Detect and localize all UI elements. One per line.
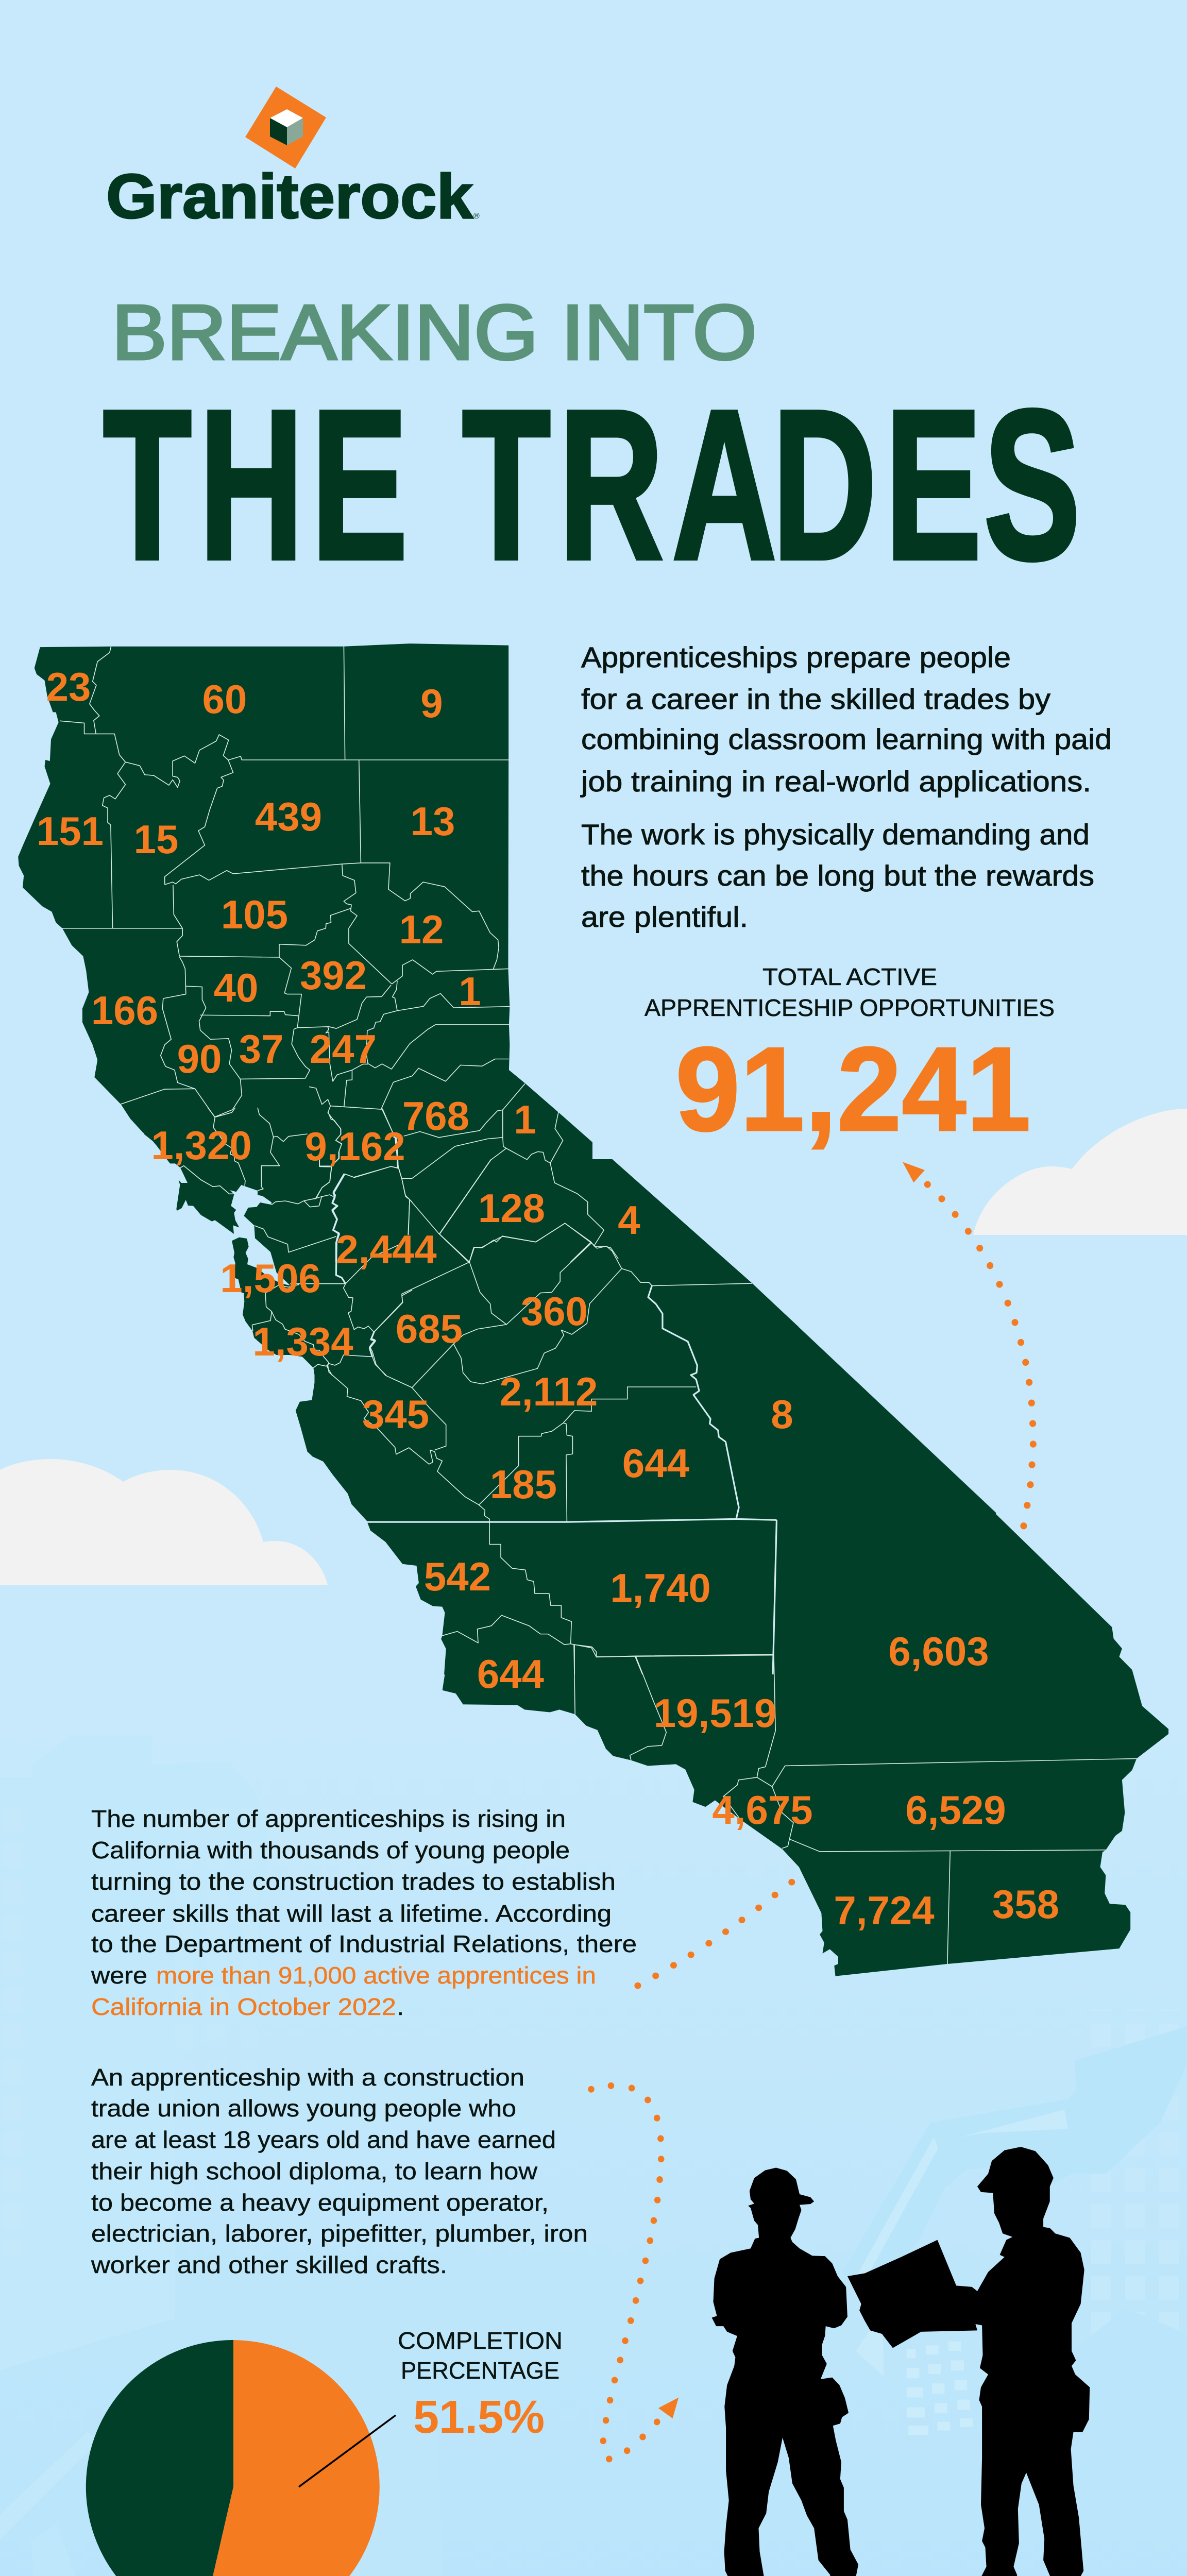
text block: apprenticeships rising: were <box>91 1962 147 1989</box>
completion label <box>398 2327 563 2443</box>
map of California counties <box>18 643 1168 1976</box>
intro text block: Apprenticeships prepare people <box>581 641 1011 673</box>
text block: apprenticeships rising: to the Department of Industrial Relations, there <box>91 1930 637 1957</box>
county apprenticeship counts: 439 <box>255 794 322 839</box>
silhouette: worker with crossed arms <box>712 2168 900 2576</box>
county apprenticeship counts: 60 <box>202 676 247 722</box>
text block: construction trade union: electrician, laborer, pipefitter, plumber, iron <box>91 2220 588 2247</box>
county apprenticeship counts: 185 <box>490 1462 557 1507</box>
county borders <box>60 647 1137 1964</box>
county apprenticeship counts <box>37 664 1059 1933</box>
county apprenticeship counts: 166 <box>91 988 158 1033</box>
total opportunities callout: APPRENTICESHIP OPPORTUNITIES <box>645 994 1055 1021</box>
county apprenticeship counts: 13 <box>411 799 455 844</box>
county apprenticeship counts: 644 <box>622 1440 689 1486</box>
total opportunities callout: 91,241 <box>675 1023 1031 1156</box>
county apprenticeship counts: 8 <box>771 1392 793 1437</box>
county apprenticeship counts: 358 <box>992 1882 1059 1927</box>
county apprenticeship counts: 4 <box>618 1197 640 1243</box>
text block: apprenticeships rising: California in October 2022 <box>91 1993 396 2020</box>
county apprenticeship counts: 105 <box>221 892 288 937</box>
intro text block: combining classroom learning with paid <box>581 723 1112 755</box>
county apprenticeship counts: 15 <box>134 817 178 862</box>
completion label: COMPLETION <box>398 2327 563 2354</box>
intro text block <box>580 641 1112 933</box>
arrow: dotted curve to workers <box>588 2082 679 2462</box>
county apprenticeship counts: 37 <box>239 1026 283 1072</box>
completion label: 51.5% <box>413 2392 545 2443</box>
faint construction backdrop <box>0 1736 1187 2576</box>
county apprenticeship counts: 19,519 <box>654 1690 776 1736</box>
intro text block: The work is physically demanding and <box>581 818 1090 851</box>
map land fill <box>18 643 1168 1976</box>
text block: construction trade union: worker and other skilled crafts. <box>91 2251 447 2278</box>
county apprenticeship counts: 2,112 <box>500 1369 598 1414</box>
county apprenticeship counts: 6,529 <box>905 1787 1006 1833</box>
county apprenticeship counts: 90 <box>177 1036 222 1081</box>
logo: Graniterock: ® <box>473 212 480 221</box>
county apprenticeship counts: 7,724 <box>834 1888 935 1933</box>
county apprenticeship counts: 40 <box>214 965 258 1010</box>
arrow: dotted from map to text <box>634 1879 795 1989</box>
county apprenticeship counts: 247 <box>310 1026 377 1072</box>
text block: construction trade union: to become a heavy equipment operator, <box>91 2189 549 2216</box>
text block: apprenticeships rising: The number of apprenticeships is rising in <box>91 1805 566 1832</box>
intro text block: job training in real-world applications. <box>580 765 1091 798</box>
county apprenticeship counts: 1 <box>459 969 481 1014</box>
intro text block: are plentiful. <box>581 901 748 933</box>
text block: apprenticeships rising <box>91 1805 637 2020</box>
text block: construction trade union: trade union allows young people who <box>91 2095 516 2122</box>
county apprenticeship counts: 542 <box>424 1554 491 1599</box>
county apprenticeship counts: 392 <box>300 953 367 998</box>
county apprenticeship counts: 6,603 <box>888 1629 989 1674</box>
pie chart: completion percentage <box>86 2340 396 2576</box>
text block: construction trade union <box>91 2064 588 2278</box>
county apprenticeship counts: 1,740 <box>610 1565 711 1611</box>
text block: apprenticeships rising: career skills that will last a lifetime. According <box>91 1900 612 1927</box>
intro text block: for a career in the skilled trades by <box>581 683 1050 715</box>
text block: apprenticeships rising: more than 91,000 active apprentices in <box>156 1962 596 1989</box>
cloud: left <box>0 1459 328 1585</box>
logo: Graniterock: Graniterock <box>106 161 473 231</box>
county apprenticeship counts: 9,162 <box>304 1124 405 1169</box>
county apprenticeship counts: 685 <box>396 1306 463 1351</box>
county apprenticeship counts: 1,320 <box>151 1123 252 1168</box>
county apprenticeship counts: 1,334 <box>252 1319 353 1364</box>
county apprenticeship counts: 360 <box>521 1289 588 1334</box>
county apprenticeship counts: 128 <box>478 1185 545 1231</box>
intro text block: the hours can be long but the rewards <box>581 859 1094 892</box>
text block: construction trade union: An apprenticeship with a construction <box>91 2064 524 2091</box>
county apprenticeship counts: 644 <box>477 1651 544 1697</box>
completion label: PERCENTAGE <box>401 2357 559 2384</box>
total opportunities callout: TOTAL ACTIVE <box>762 963 937 990</box>
logo: Graniterock <box>106 87 480 231</box>
cloud: right <box>973 1109 1187 1235</box>
county apprenticeship counts: 23 <box>46 664 91 709</box>
county apprenticeship counts: 151 <box>37 808 104 854</box>
county apprenticeship counts: 12 <box>399 907 444 952</box>
text block: apprenticeships rising: . <box>397 1993 404 2020</box>
county apprenticeship counts: 1 <box>514 1097 536 1142</box>
text block: construction trade union: their high school diploma, to learn how <box>91 2158 538 2184</box>
total opportunities callout <box>645 963 1055 1156</box>
county apprenticeship counts: 1,506 <box>220 1256 321 1301</box>
arrow: dotted to total <box>903 1162 1037 1529</box>
county apprenticeship counts: 345 <box>362 1392 429 1437</box>
county apprenticeship counts: 9 <box>420 681 443 726</box>
county apprenticeship counts: 4,675 <box>712 1787 813 1833</box>
silhouette: worker holding plans <box>847 2147 1090 2576</box>
title: The Trades: THE TRADES <box>103 366 1080 604</box>
county apprenticeship counts: 768 <box>402 1093 469 1139</box>
text block: construction trade union: are at least 18 years old and have earned <box>91 2126 556 2153</box>
text block: apprenticeships rising: turning to the construction trades to establish <box>91 1868 616 1895</box>
text block: apprenticeships rising: California with thousands of young people <box>91 1837 570 1863</box>
county apprenticeship counts: 2,444 <box>336 1227 437 1272</box>
title: Breaking into: BREAKING INTO <box>112 289 757 376</box>
